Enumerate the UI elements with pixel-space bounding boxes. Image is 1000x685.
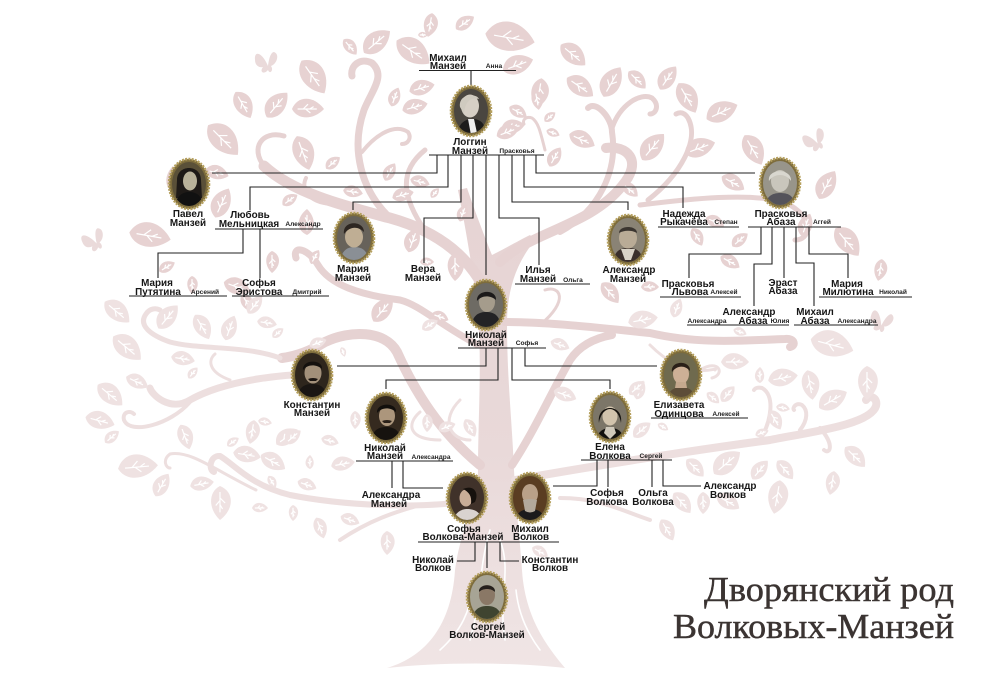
person: Александр Абаза: Александр bbox=[723, 307, 775, 318]
person: Илья Манзей: Илья bbox=[525, 265, 551, 276]
person: Мария Милютина: Николай bbox=[879, 288, 907, 296]
person: Илья Манзей: Ольга bbox=[563, 277, 583, 284]
person: Мария Манзей: Мария bbox=[337, 264, 369, 275]
person: Сергей Волков-Манзей: Сергей bbox=[471, 622, 505, 633]
portrait: Николай младший bbox=[366, 393, 406, 444]
person: Елена Волкова: Сергей bbox=[640, 452, 662, 460]
person: Любовь Мельницкая: Мельницкая bbox=[219, 219, 279, 230]
person: Константин Манзей bbox=[284, 350, 340, 419]
person: Елена Волкова: Волкова bbox=[589, 451, 631, 462]
person: Прасковья Абаза: Абаза bbox=[767, 217, 796, 228]
tree branches: upper crown bbox=[258, 61, 808, 465]
person: Николай Волков bbox=[412, 555, 454, 574]
person: Михаил Волков bbox=[510, 473, 550, 543]
person: Александра Манзей bbox=[362, 490, 421, 510]
person: Прасковья Львова bbox=[662, 279, 738, 298]
tree branches: lower crown bbox=[124, 309, 876, 540]
person: Логгин Манзей: Прасковья bbox=[499, 148, 535, 155]
person: Александр Манзей: Александр bbox=[603, 265, 655, 276]
person: Николай Манзей: Николай bbox=[465, 330, 507, 341]
person: Николай Манзей (сын) bbox=[364, 393, 451, 462]
person: Александр Волков bbox=[704, 481, 756, 501]
person: Елизавета Одинцова: Елизавета bbox=[654, 400, 705, 411]
person: Михаил Манзей: Анна bbox=[486, 63, 503, 70]
title: Волковых-Манзей bbox=[673, 607, 954, 646]
person: Софья Эристова: Софья bbox=[242, 278, 276, 289]
person: Софья Волкова bbox=[586, 488, 628, 508]
person: Александр Абаза: Абаза bbox=[739, 316, 768, 327]
person: Мария Путятина bbox=[135, 278, 219, 298]
person: Прасковья Львова: Алексей bbox=[710, 288, 738, 296]
person: Софья Волкова-Манзей bbox=[423, 473, 503, 543]
person: Мария Путятина: Мария bbox=[141, 278, 173, 289]
person: Павел Манзей: Манзей bbox=[170, 218, 206, 229]
person: Александр Манзей bbox=[603, 215, 655, 285]
person: Мария Милютина: Милютина bbox=[822, 287, 874, 298]
person: Сергей Волков-Манзей: Волков-Манзей bbox=[449, 630, 525, 641]
person: Мария Милютина bbox=[822, 279, 907, 298]
person: Константин Волков bbox=[522, 555, 578, 574]
person: Константин Манзей: Константин bbox=[284, 400, 340, 411]
person: Николай Манзей (сын): Манзей bbox=[367, 451, 403, 462]
person: Николай Манзей: Софья bbox=[516, 340, 538, 347]
person: Михаил Манзей: Михаил bbox=[429, 53, 467, 64]
person: Мария Манзей: Манзей bbox=[335, 273, 371, 284]
person: Прасковья Абаза: Аггей bbox=[813, 218, 831, 226]
connector lines bbox=[129, 70, 912, 568]
person: Ольга Волкова bbox=[632, 488, 674, 508]
person: Елизавета Одинцова: Алексей bbox=[712, 410, 740, 418]
person: Логгин Манзей bbox=[451, 86, 535, 157]
portrait: Павел bbox=[169, 159, 209, 209]
person: Вера Манзей: Вера bbox=[411, 264, 436, 275]
person: Любовь Мельницкая: Любовь bbox=[230, 210, 270, 221]
leaves: lower crown bbox=[83, 292, 878, 561]
person: Прасковья Абаза bbox=[755, 158, 831, 228]
person: Илья Манзей bbox=[520, 265, 583, 285]
person: Вера Манзей: Манзей bbox=[405, 273, 441, 284]
portrait: Сергей bbox=[467, 572, 507, 623]
person: Эраст Абаза: Абаза bbox=[769, 286, 798, 297]
portrait: Прасковья bbox=[760, 158, 800, 209]
person: Михаил Абаза: Александра bbox=[837, 318, 877, 325]
person: Александра Манзей: Александра bbox=[362, 490, 421, 501]
person: Логгин Манзей: Логгин bbox=[453, 137, 487, 148]
person: Николай Волков: Николай bbox=[412, 555, 454, 566]
person: Вера Манзей bbox=[405, 264, 441, 284]
person: Константин Манзей: Манзей bbox=[294, 408, 330, 419]
person: Константин Волков: Волков bbox=[532, 563, 568, 574]
person: Ольга Волкова: Волкова bbox=[632, 497, 674, 508]
person: Павел Манзей: Павел bbox=[173, 209, 203, 220]
person: Михаил Манзей bbox=[429, 53, 503, 72]
person: Илья Манзей: Манзей bbox=[520, 274, 556, 285]
person: Елизавета Одинцова bbox=[654, 350, 740, 420]
person: Сергей Волков-Манзей bbox=[449, 572, 525, 641]
person: Константин Волков: Константин bbox=[522, 555, 578, 566]
portrait: Александр bbox=[608, 215, 648, 266]
person: Александр Волков: Волков bbox=[710, 490, 746, 501]
person: Николай Манзей (сын): Николай bbox=[364, 443, 406, 454]
person: Прасковья Львова: Львова bbox=[672, 287, 709, 298]
person: Николай Манзей: Манзей bbox=[468, 338, 504, 349]
portrait: Михаил bbox=[510, 473, 550, 524]
tree trunk bbox=[387, 188, 565, 668]
title: Дворянский род bbox=[704, 570, 954, 609]
person: Прасковья Львова: Прасковья bbox=[662, 279, 715, 290]
person: Михаил Волков: Михаил bbox=[511, 524, 549, 535]
person: Николай Волков: Волков bbox=[415, 563, 451, 574]
person: Любовь Мельницкая: Александр bbox=[285, 221, 321, 228]
portrait: Мария bbox=[334, 213, 374, 266]
person: Ольга Волкова: Ольга bbox=[638, 488, 668, 499]
portrait: Логгин bbox=[451, 86, 491, 139]
person: Прасковья Абаза: Прасковья bbox=[755, 209, 808, 220]
person: Николай Манзей (сын): Александра bbox=[411, 454, 451, 461]
person: Софья Волкова-Манзей: Волкова-Манзей bbox=[423, 532, 503, 543]
person: Надежда Рыкачёва: Надежда bbox=[662, 209, 706, 220]
portrait: Елизавета bbox=[661, 350, 701, 401]
person: Логгин Манзей: Манзей bbox=[452, 146, 488, 157]
person: Любовь Мельницкая bbox=[219, 210, 321, 230]
person: Мария Манзей bbox=[334, 213, 374, 284]
portrait: Софья bbox=[447, 473, 487, 524]
tree background bbox=[80, 11, 895, 668]
person: Александр Волков: Александр bbox=[704, 481, 756, 492]
person: Софья Эристова: Дмитрий bbox=[292, 288, 322, 296]
person: Павел Манзей bbox=[169, 159, 209, 229]
leaves: upper crown bbox=[127, 11, 889, 327]
person: Михаил Абаза: Абаза bbox=[801, 316, 830, 327]
person: Александра Манзей: Манзей bbox=[371, 499, 407, 510]
person: Михаил Абаза bbox=[796, 307, 877, 327]
icon: butterflies bbox=[80, 52, 895, 335]
portrait: Николай bbox=[466, 280, 506, 331]
person: Александр Манзей: Манзей bbox=[610, 274, 646, 285]
person: Надежда Рыкачёва: Рыкачёва bbox=[660, 217, 708, 228]
person: Елена Волкова bbox=[589, 392, 662, 462]
title bbox=[673, 570, 954, 646]
portrait: Константин bbox=[292, 350, 332, 401]
person: Мария Милютина: Мария bbox=[831, 279, 863, 290]
person: Софья Эристова bbox=[236, 278, 322, 298]
person: Мария Путятина: Путятина bbox=[135, 287, 181, 298]
person: Елизавета Одинцова: Одинцова bbox=[654, 409, 704, 420]
person: Софья Волкова: Софья bbox=[590, 488, 624, 499]
person: Надежда Рыкачёва: Степан bbox=[714, 219, 738, 226]
person: Мария Путятина: Арсений bbox=[191, 288, 219, 296]
person: Николай Манзей bbox=[465, 280, 538, 349]
person: Софья Эристова: Эристова bbox=[236, 287, 283, 298]
person: Александр Абаза bbox=[687, 307, 790, 327]
person: Михаил Абаза: Михаил bbox=[796, 307, 834, 318]
person: Елена Волкова: Елена bbox=[595, 442, 625, 453]
portrait: Елена bbox=[590, 392, 630, 443]
trunk carving bbox=[440, 530, 540, 650]
person: Софья Волкова: Волкова bbox=[586, 497, 628, 508]
person: Александр Абаза: Юлия bbox=[771, 318, 790, 325]
person: Эраст Абаза bbox=[769, 278, 798, 297]
person: Эраст Абаза: Эраст bbox=[769, 278, 798, 289]
person: Михаил Манзей: Манзей bbox=[430, 61, 466, 72]
person: Софья Волкова-Манзей: Софья bbox=[447, 524, 481, 535]
person: Надежда Рыкачёва bbox=[660, 209, 738, 228]
person: Михаил Волков: Волков bbox=[513, 532, 549, 543]
person: Александр Абаза: Александра bbox=[687, 318, 727, 325]
